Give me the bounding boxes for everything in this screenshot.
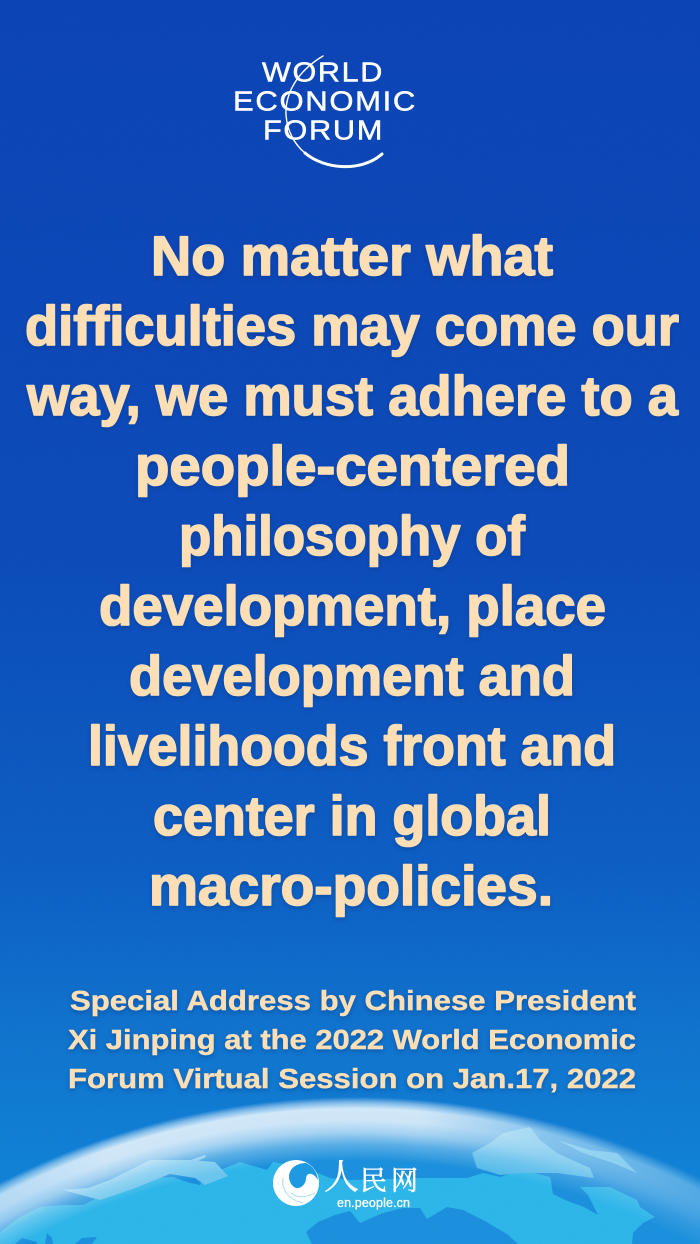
source attribution: Special Address by Chinese President [70,985,636,1016]
main quote: macro-policies. [149,855,553,917]
main quote: people-centered [135,435,570,497]
icon: swirl emblem [273,1160,319,1206]
main quote: development, place [99,575,606,637]
main quote: difficulties may come our [25,295,679,357]
site address: en.people.cn [337,1196,410,1210]
globe [0,1090,700,1244]
logo wordmark: FORUM [263,114,384,146]
main quote [25,225,679,917]
main quote: way, we must adhere to a [26,365,679,427]
wordmark: 网 [391,1166,418,1196]
logo: World Economic Forum [233,56,417,167]
source attribution: Forum Virtual Session on Jan.17, 2022 [68,1063,636,1094]
wordmark: 人 [324,1158,359,1197]
source attribution [68,985,636,1094]
main quote: philosophy of [179,505,525,567]
logo: People's Daily Online [273,1158,418,1210]
landmasses [0,1127,655,1244]
main quote: development and [129,645,575,707]
main quote: No matter what [151,225,553,287]
logo wordmark: WORLD [262,56,384,88]
main quote: livelihoods front and [88,715,616,777]
ocean [0,1090,700,1244]
atmosphere band [0,1090,700,1244]
source attribution: Xi Jinping at the 2022 World Economic [68,1024,636,1055]
wordmark: 民 [360,1166,387,1196]
wordmark [324,1158,418,1197]
logo arc [286,56,382,167]
main quote: center in global [153,785,551,847]
logo wordmark: ECONOMIC [233,86,417,116]
logo wordmark [233,56,417,146]
